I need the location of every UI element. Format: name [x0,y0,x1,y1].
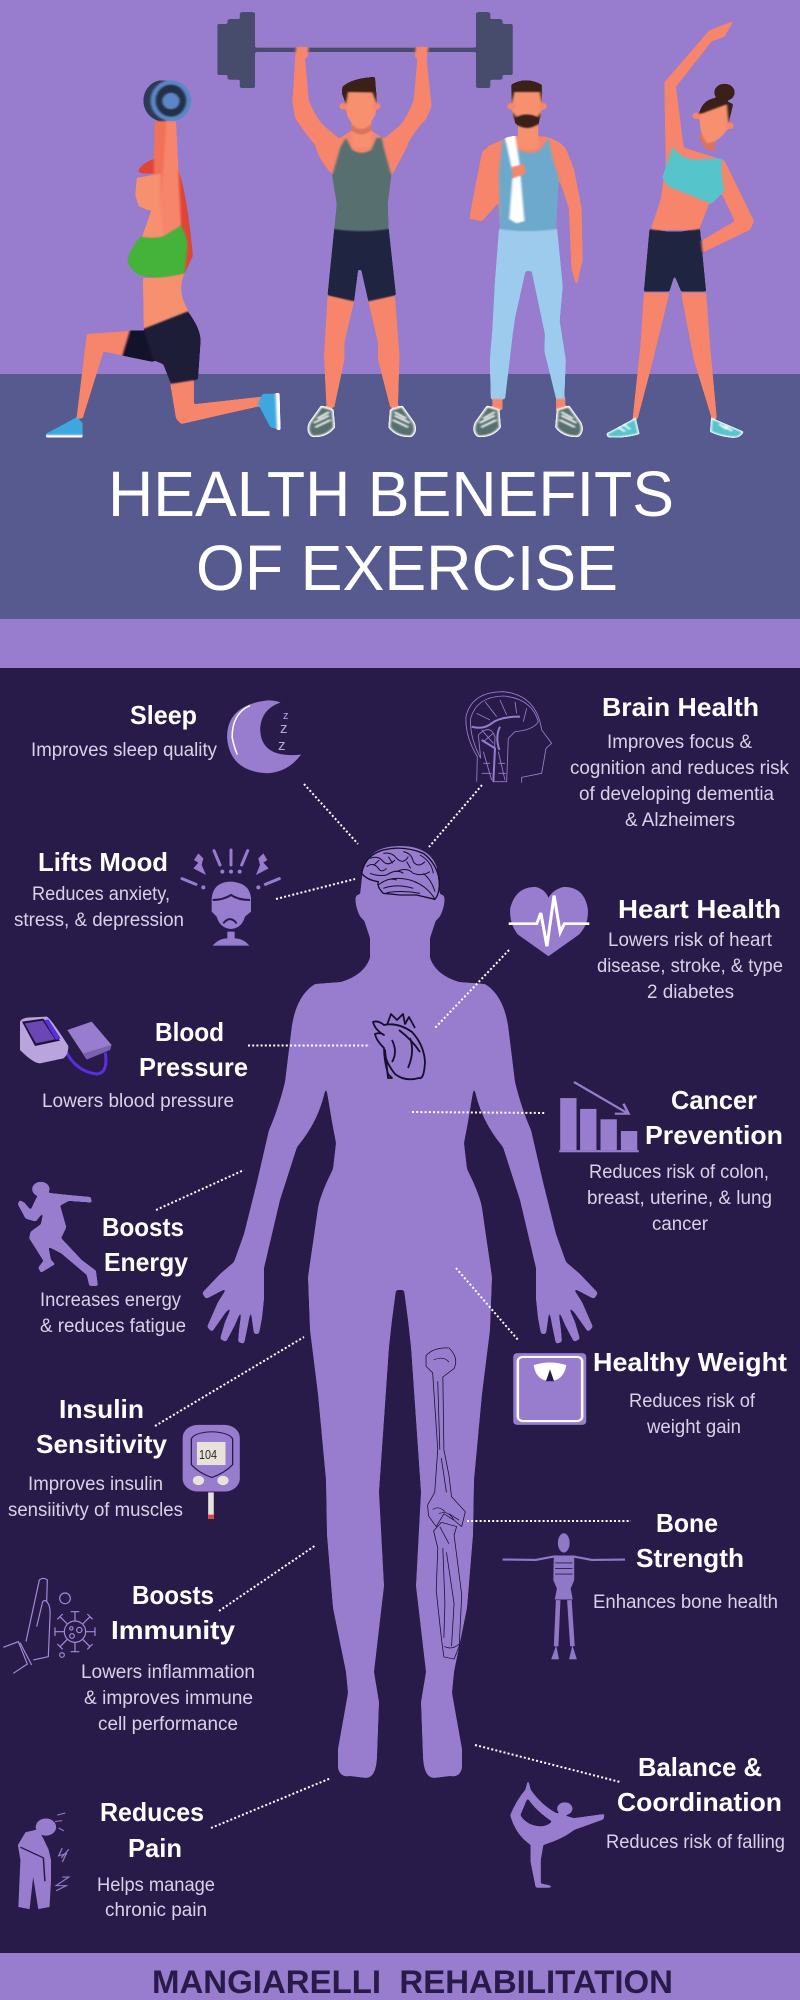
block: Boosts Immunity: Immunity [111,1615,236,1645]
block: Boosts Immunity: Boosts [132,1580,214,1610]
human body silhouette [202,846,598,1778]
block: Cancer Prevention: Cancer [671,1085,757,1115]
block: Cancer Prevention: breast, uterine, & lung [587,1188,772,1209]
block: Heart Health: Heart Health [618,894,781,924]
block: Heart Health: 2 diabetes [647,982,734,1003]
block: Boosts Immunity [81,1580,255,1735]
block: Boosts Energy: & reduces fatigue [40,1316,186,1337]
icon: declining bar chart [559,1082,639,1152]
background: light purple wall [0,0,800,668]
icon: moon z letters [278,710,288,754]
block: Reduces Pain: chronic pain [105,1900,207,1921]
block: Bone Strength [593,1508,778,1613]
barbell [217,12,513,88]
man with towel [469,80,583,436]
icon: moon z letters: z [280,720,288,737]
connector lines [155,784,631,1828]
icon: glucose meter reading: 104 [199,1447,217,1462]
block: Brain Health: cognition and reduces risk [570,758,789,779]
block: Brain Health: & Alzheimers [625,810,735,831]
icon: moon z letters: z [278,737,286,754]
block: Healthy Weight: weight gain [646,1417,741,1438]
block: Boosts Energy: Increases energy [40,1290,181,1311]
icon: glucose meter [183,1425,240,1519]
block: Bone Strength: Bone [656,1508,718,1538]
block: Balance & Coordination: Reduces risk of falling [606,1832,785,1853]
title: HEALTH BENEFITS [108,458,674,530]
block: Sleep: Sleep [130,700,197,730]
block: Cancer Prevention: cancer [652,1214,709,1235]
block: Reduces Pain: Pain [128,1833,182,1863]
footer band [0,1953,800,2000]
footer text: MANGIARELLI REHABILITATION [152,1964,673,2000]
block: Reduces Pain [97,1797,215,1921]
block: Sleep [31,700,217,761]
block: Boosts Energy: Boosts [102,1212,184,1242]
block: Bone Strength: Enhances bone health [593,1592,778,1613]
icon: yoga balance pose [510,1779,605,1888]
block: Brain Health: Brain Health [602,692,759,722]
icon: running woman [18,1182,98,1286]
block: Lifts Mood: Reduces anxiety, [32,884,170,905]
icon: person in pain [18,1813,69,1909]
man lifting barbell [292,47,432,436]
block: Healthy Weight: Healthy Weight [593,1347,787,1377]
anatomical heart [373,1014,425,1079]
block: Reduces Pain: Reduces [100,1797,204,1827]
block: Heart Health: disease, stroke, & type [597,956,783,977]
icon: moon z letters: z [283,710,288,722]
block: Heart Health: Lowers risk of heart [608,930,773,951]
block: Balance & Coordination [606,1752,785,1853]
block: Balance & Coordination: Balance & [638,1752,762,1782]
block: Boosts Energy: Energy [104,1247,189,1277]
leg bones [426,1348,465,1659]
block: Healthy Weight: Reduces risk of [629,1391,756,1412]
title [108,458,674,604]
block: Lifts Mood [14,847,184,931]
block: Bone Strength: Strength [636,1543,744,1573]
block: Cancer Prevention [587,1085,783,1235]
block: Blood Pressure: Lowers blood pressure [42,1091,234,1112]
icon: hand stopping virus [3,1578,95,1673]
illustration: exercising people [46,12,754,438]
block: Cancer Prevention: Prevention [645,1120,783,1150]
block: Blood Pressure: Blood [155,1017,224,1047]
background: gym floor and title band [0,374,800,619]
anatomical brain on head [362,848,439,899]
woman lunging with dumbbell [46,80,281,438]
block: Sleep: Improves sleep quality [31,740,217,761]
title: OF EXERCISE [196,532,618,604]
block: Brain Health [570,692,789,831]
icon: crescent moon [227,700,301,773]
icon: weighing scale [513,1353,586,1425]
block: Boosts Immunity: & improves immune [84,1688,253,1709]
woman stretching [607,21,754,437]
block: Insulin Sensitivity: sensiitivty of muscles [8,1500,183,1521]
block: Blood Pressure [42,1017,248,1112]
icon: blood pressure monitor [20,1017,112,1074]
background: dark panel [0,668,800,1953]
block: Reduces Pain: Helps manage [97,1875,215,1896]
block: Insulin Sensitivity: Insulin [59,1394,144,1424]
block: Lifts Mood: Lifts Mood [38,847,168,877]
icon: stressed person [182,850,279,946]
block: Balance & Coordination: Coordination [617,1787,782,1817]
block: Insulin Sensitivity: Sensitivity [36,1429,168,1459]
block: Healthy Weight [593,1347,787,1438]
icon: heart with pulse line [509,887,589,956]
icon: head and brain outline [466,692,552,783]
block: Heart Health [597,894,783,1003]
block: Boosts Energy [40,1212,189,1337]
block: Boosts Immunity: Lowers inflammation [81,1662,255,1683]
icon: skeleton [503,1533,625,1659]
block: Cancer Prevention: Reduces risk of colon, [589,1162,769,1183]
block: Boosts Immunity: cell performance [98,1714,238,1735]
block: Insulin Sensitivity [8,1394,183,1521]
block: Brain Health: Improves focus & [607,732,752,753]
block: Insulin Sensitivity: Improves insulin [28,1474,163,1495]
block: Blood Pressure: Pressure [139,1052,248,1082]
block: Brain Health: of developing dementia [579,784,774,805]
block: Lifts Mood: stress, & depression [14,910,184,931]
